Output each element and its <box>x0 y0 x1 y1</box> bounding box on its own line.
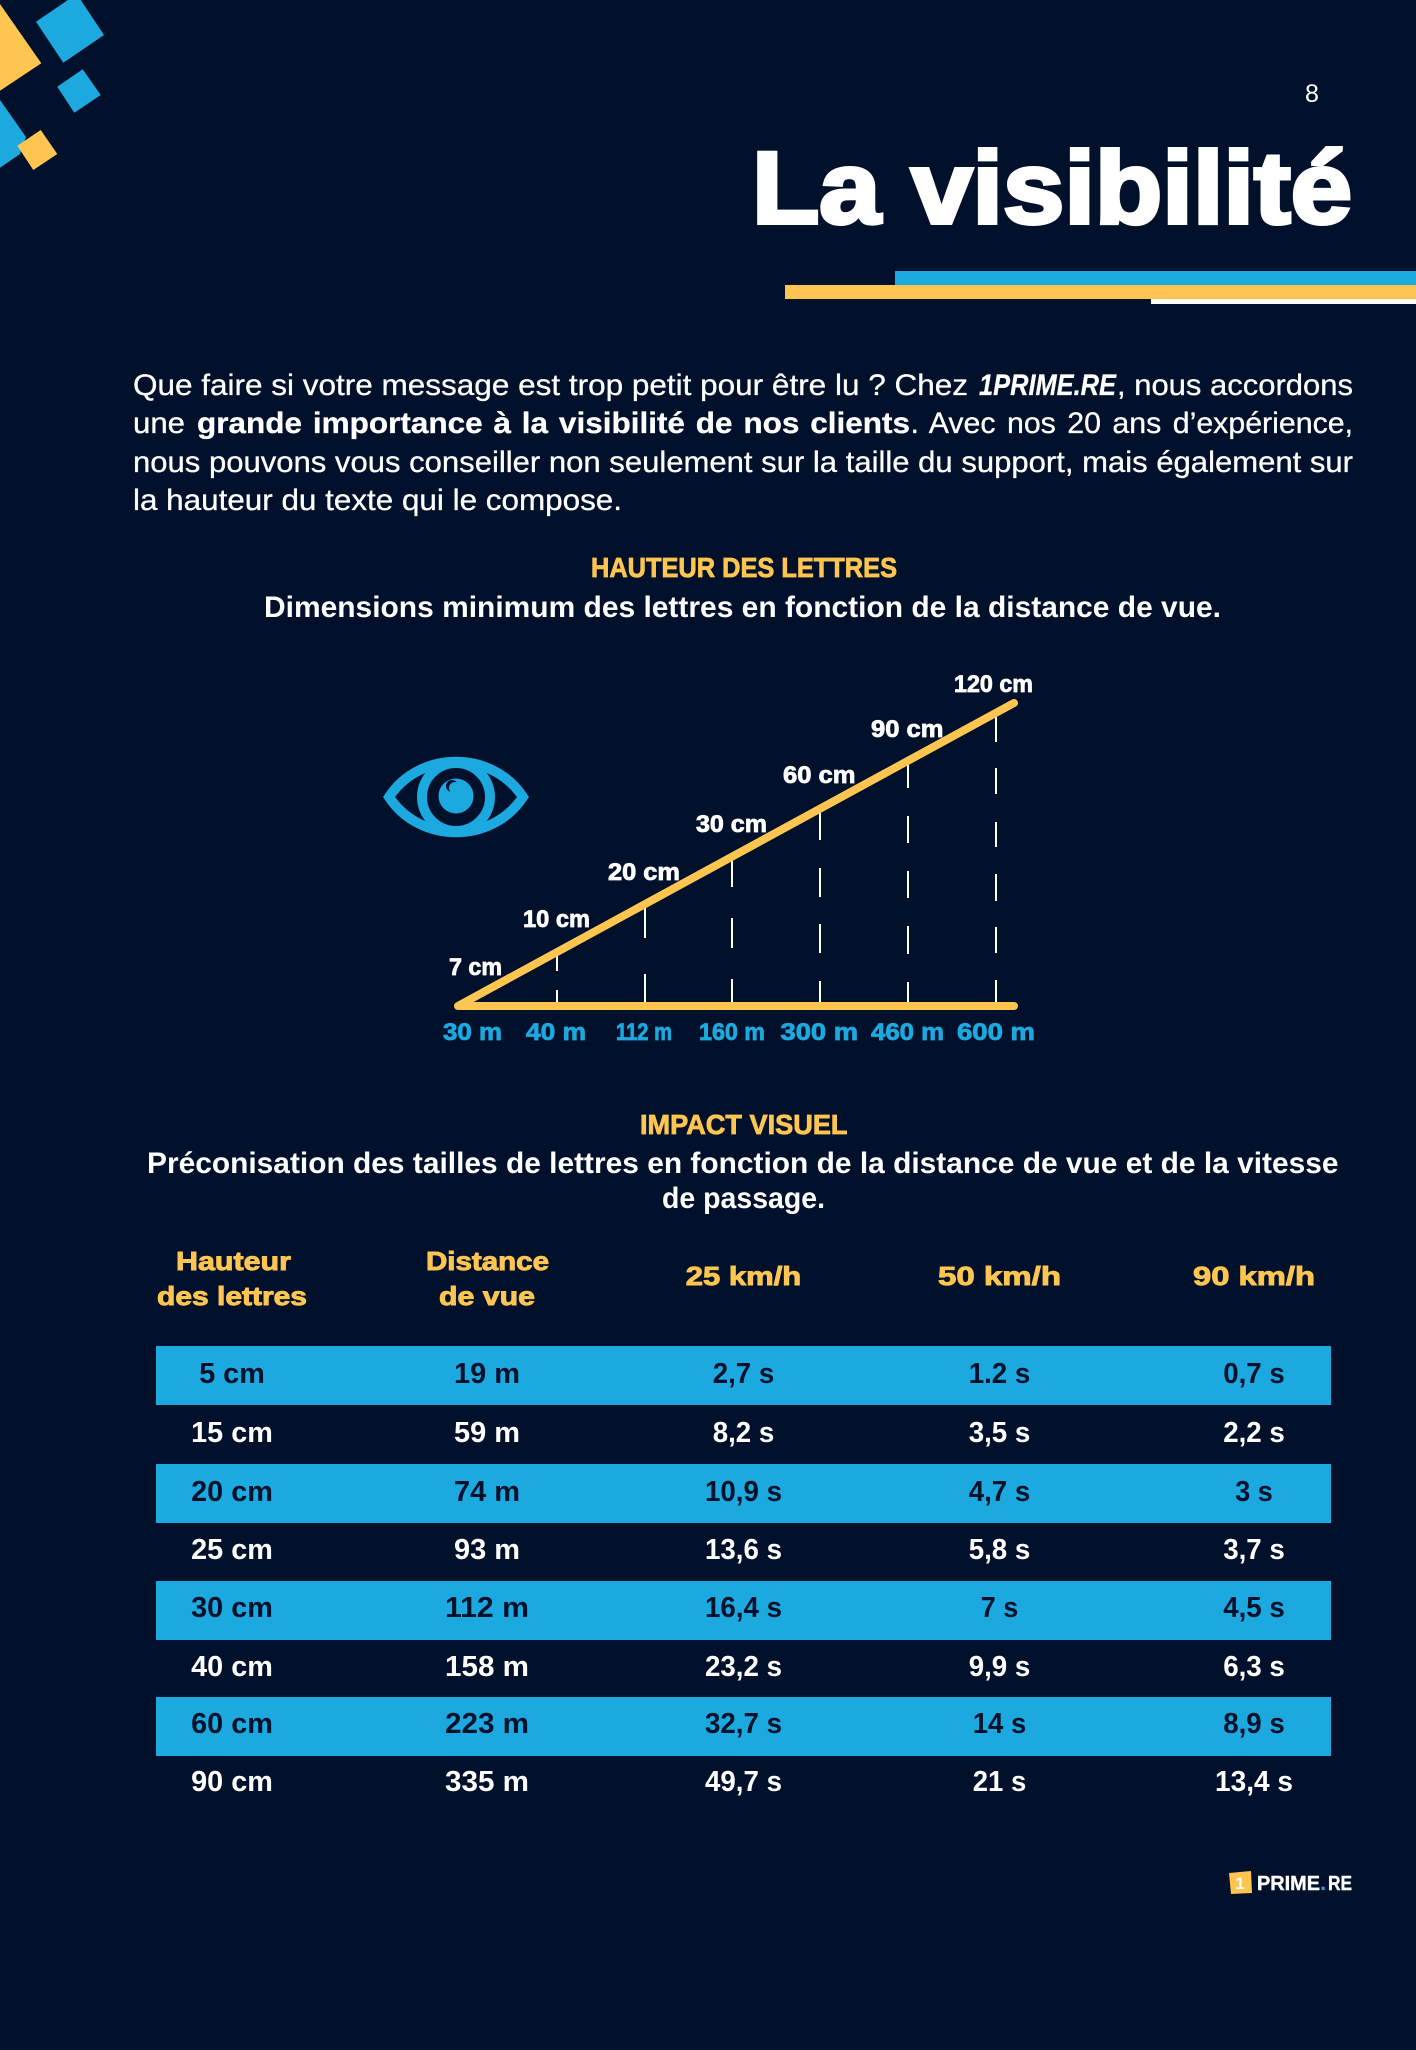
dashed drop lines <box>557 717 996 1006</box>
distance labels: 300 m <box>780 1019 858 1046</box>
row 15 cm: 8,2 s <box>713 1417 774 1449</box>
row 40 cm <box>191 1651 1285 1683</box>
logo: 1PRIME.RE <box>1229 1870 1352 1895</box>
triangle axes <box>458 703 1014 1006</box>
intro paragraph: Que faire si votre message est trop petit pour être lu ? Chez <box>133 369 968 402</box>
heading: hauteur des lettres: Dimensions minimum des lettres en fonction de la distance de vue. <box>264 591 1221 624</box>
row 5 cm: 2,7 s <box>713 1358 774 1390</box>
row 60 cm: 32,7 s <box>705 1708 782 1740</box>
row 20 cm: 4,7 s <box>969 1476 1030 1508</box>
table header: 50 km/h <box>938 1261 1061 1291</box>
heading: impact visuel: IMPACT VISUEL <box>640 1109 848 1140</box>
height labels: 30 cm <box>696 811 767 838</box>
height labels: 7 cm <box>449 954 502 981</box>
row 20 cm: 20 cm <box>191 1476 273 1508</box>
row 25 cm: 13,6 s <box>705 1534 782 1566</box>
distance labels: 460 m <box>871 1019 944 1046</box>
intro paragraph: nous pouvons vous conseiller non seulement sur la taille du support, mais également sur <box>133 446 1353 479</box>
table header: Hauteur <box>176 1246 291 1276</box>
row 25 cm: 93 m <box>454 1534 520 1566</box>
intro paragraph: grande importance à la visibilité de nos clients <box>197 407 910 440</box>
heading: hauteur des lettres <box>264 552 1221 624</box>
row 60 cm: 223 m <box>445 1708 529 1740</box>
icon: eye <box>389 762 523 832</box>
row 90 cm: 90 cm <box>191 1766 273 1798</box>
logo: 1PRIME.RE: 1 <box>1235 1874 1245 1893</box>
row 15 cm: 2,2 s <box>1223 1417 1285 1449</box>
chart: letter height vs viewing distance <box>443 671 1035 1046</box>
table header: 25 km/h <box>686 1261 801 1291</box>
row 40 cm: 6,3 s <box>1223 1651 1285 1683</box>
row 60 cm: 8,9 s <box>1223 1708 1285 1740</box>
table header <box>157 1246 1315 1311</box>
table header: Distance <box>426 1246 549 1276</box>
row 40 cm: 9,9 s <box>969 1651 1030 1683</box>
table: impact visuel <box>156 1246 1331 1798</box>
row 90 cm: 21 s <box>973 1766 1026 1798</box>
intro paragraph: , nous accordons <box>1117 369 1353 402</box>
row 60 cm: 60 cm <box>191 1708 273 1740</box>
row 25 cm: 25 cm <box>191 1534 273 1566</box>
height labels <box>449 671 1033 981</box>
row 90 cm <box>191 1766 1293 1798</box>
row 15 cm: 15 cm <box>191 1417 273 1449</box>
height labels: 10 cm <box>523 906 590 933</box>
page number: 8 <box>1305 80 1319 108</box>
row 20 cm: 3 s <box>1235 1476 1273 1508</box>
row 30 cm: 30 cm <box>191 1592 273 1624</box>
distance labels: 600 m <box>957 1019 1035 1046</box>
row 30 cm: 7 s <box>981 1592 1018 1624</box>
heading: impact visuel: de passage. <box>662 1182 825 1215</box>
row 30 cm: 4,5 s <box>1223 1592 1285 1624</box>
height labels: 90 cm <box>871 716 944 743</box>
logo: 1PRIME.RE: RE <box>1328 1873 1352 1895</box>
row 90 cm: 49,7 s <box>705 1766 782 1798</box>
row 60 cm: 14 s <box>973 1708 1026 1740</box>
row 5 cm <box>156 1346 1331 1405</box>
distance labels: 30 m <box>443 1019 502 1046</box>
table header: de vue <box>439 1281 535 1311</box>
title underline bars <box>785 271 1416 304</box>
height labels: 20 cm <box>608 859 680 886</box>
intro paragraph: 1PRIME.RE <box>979 369 1117 402</box>
row 15 cm: 59 m <box>454 1417 520 1449</box>
row 60 cm <box>156 1697 1331 1756</box>
title: La visibilité <box>752 131 1352 245</box>
row 5 cm: 0,7 s <box>1223 1358 1285 1390</box>
row 90 cm: 13,4 s <box>1215 1766 1293 1798</box>
heading: impact visuel: Préconisation des tailles de lettres en fonction de la distance de vue et de la vitesse <box>147 1147 1338 1180</box>
row 15 cm <box>191 1417 1285 1449</box>
height labels: 120 cm <box>954 671 1033 698</box>
row 20 cm: 74 m <box>454 1476 520 1508</box>
row 5 cm: 1.2 s <box>969 1358 1030 1390</box>
intro paragraph: . Avec nos 20 ans d’expérience, <box>910 407 1353 440</box>
row 40 cm: 23,2 s <box>705 1651 782 1683</box>
row 20 cm <box>156 1464 1331 1523</box>
row 90 cm: 335 m <box>445 1766 529 1798</box>
row 30 cm <box>156 1581 1331 1640</box>
distance labels: 112 m <box>616 1019 672 1046</box>
logo: 1PRIME.RE: . <box>1320 1870 1326 1895</box>
row 20 cm: 10,9 s <box>705 1476 782 1508</box>
row 5 cm: 19 m <box>454 1358 520 1390</box>
distance labels: 160 m <box>699 1019 765 1046</box>
row 40 cm: 158 m <box>445 1651 529 1683</box>
row 5 cm: 5 cm <box>199 1358 265 1390</box>
row 15 cm: 3,5 s <box>969 1417 1030 1449</box>
row 25 cm: 3,7 s <box>1223 1534 1285 1566</box>
table header: des lettres <box>157 1281 307 1311</box>
row 25 cm <box>191 1534 1285 1566</box>
intro paragraph: une <box>133 407 185 440</box>
intro paragraph: la hauteur du texte qui le compose. <box>133 484 622 517</box>
intro paragraph <box>133 369 1353 517</box>
logo: 1PRIME.RE: PRIME <box>1257 1873 1320 1895</box>
heading: impact visuel <box>147 1109 1338 1215</box>
row 25 cm: 5,8 s <box>969 1534 1030 1566</box>
row 30 cm: 16,4 s <box>705 1592 782 1624</box>
distance labels <box>443 1019 1035 1046</box>
row 40 cm: 40 cm <box>191 1651 273 1683</box>
height labels: 60 cm <box>783 762 856 789</box>
table header: 90 km/h <box>1193 1261 1315 1291</box>
corner decoration: tilted squares <box>0 0 104 170</box>
row 30 cm: 112 m <box>445 1592 529 1624</box>
heading: hauteur des lettres: HAUTEUR DES LETTRES <box>591 552 897 583</box>
distance labels: 40 m <box>526 1019 586 1046</box>
